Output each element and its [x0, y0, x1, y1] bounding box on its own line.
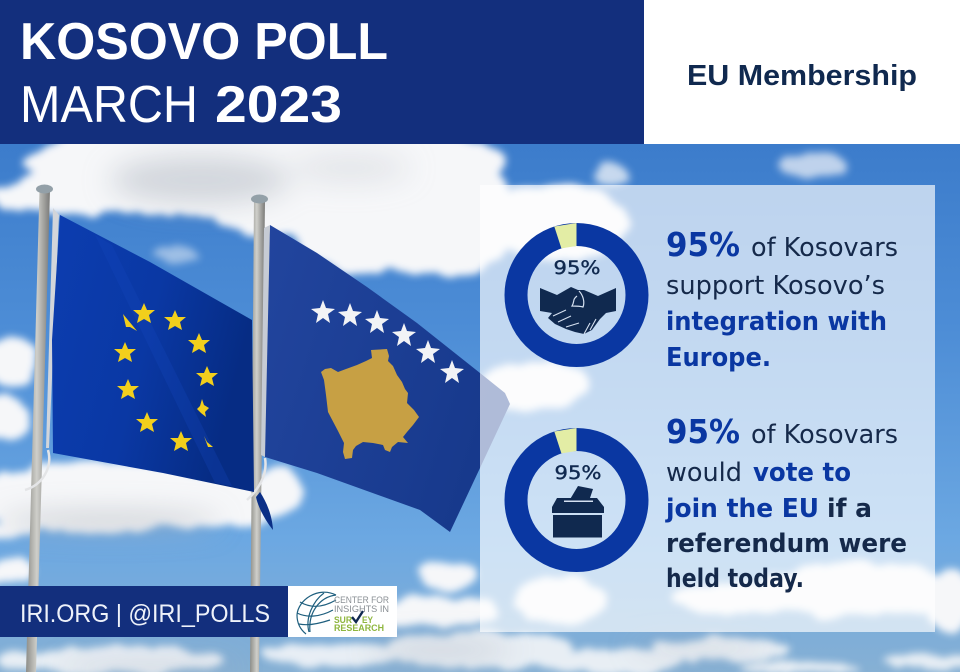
Kosovo flag [261, 225, 510, 532]
statement 2 text: held today. [666, 564, 804, 594]
logo: Center for Insights in Survey Research: SUR [334, 615, 352, 626]
statement 1 text: of Kosovars [751, 233, 898, 263]
statement 2 text: vote to [753, 458, 851, 488]
donut chart: vote 95% [516, 428, 637, 560]
title: March 2023: 2023 [215, 76, 342, 134]
donut chart: integration 95%: 95% [554, 257, 600, 279]
footer: website and handle [0, 586, 288, 637]
title: Kosovo Poll: KOSOVO POLL [20, 13, 388, 71]
donut chart: integration 95% [516, 223, 637, 356]
logo: Center for Insights in Survey Research [288, 586, 397, 637]
translucent results panel [480, 185, 935, 632]
title: March 2023: MARCH [20, 76, 198, 134]
statement 2 text: join the EU [665, 494, 819, 524]
statement 2 text: would [666, 458, 742, 488]
Kosovo map [321, 349, 419, 459]
flag poles [25, 184, 268, 672]
statement 1 text [666, 225, 898, 373]
statement 2 text [665, 412, 907, 594]
EU flag [52, 215, 273, 530]
topic box: EU Membership [644, 0, 960, 144]
footer: website and handle: IRI.ORG | @IRI_POLLS [20, 600, 270, 628]
statement 1 text: integration with [666, 307, 887, 337]
statement 1 text: 95% [666, 225, 740, 264]
statement 2 text: if a [827, 494, 872, 524]
statement 2 text: of Kosovars [751, 420, 898, 450]
donut chart: vote 95%: 95% [554, 462, 602, 484]
Kosovo stars [311, 300, 464, 383]
statement 2 text: 95% [666, 412, 740, 451]
topic box: EU Membership: EU Membership [687, 60, 917, 92]
icon: handshake [540, 287, 616, 334]
statement 2 text: referendum were [666, 529, 907, 559]
logo: Center for Insights in Survey Research: CENTER FOR [334, 595, 389, 606]
header band [0, 0, 644, 144]
statement 1 text: Europe. [666, 343, 771, 373]
icon: ballot box [552, 486, 604, 538]
logo: Center for Insights in Survey Research: EY [362, 615, 374, 626]
logo: Center for Insights in Survey Research: INSIGHTS IN [334, 604, 389, 615]
logo: Center for Insights in Survey Research: RESEARCH [334, 623, 384, 634]
icon: globe [297, 592, 336, 634]
statement 1 text: support Kosovo’s [666, 271, 885, 301]
EU stars [114, 303, 218, 451]
